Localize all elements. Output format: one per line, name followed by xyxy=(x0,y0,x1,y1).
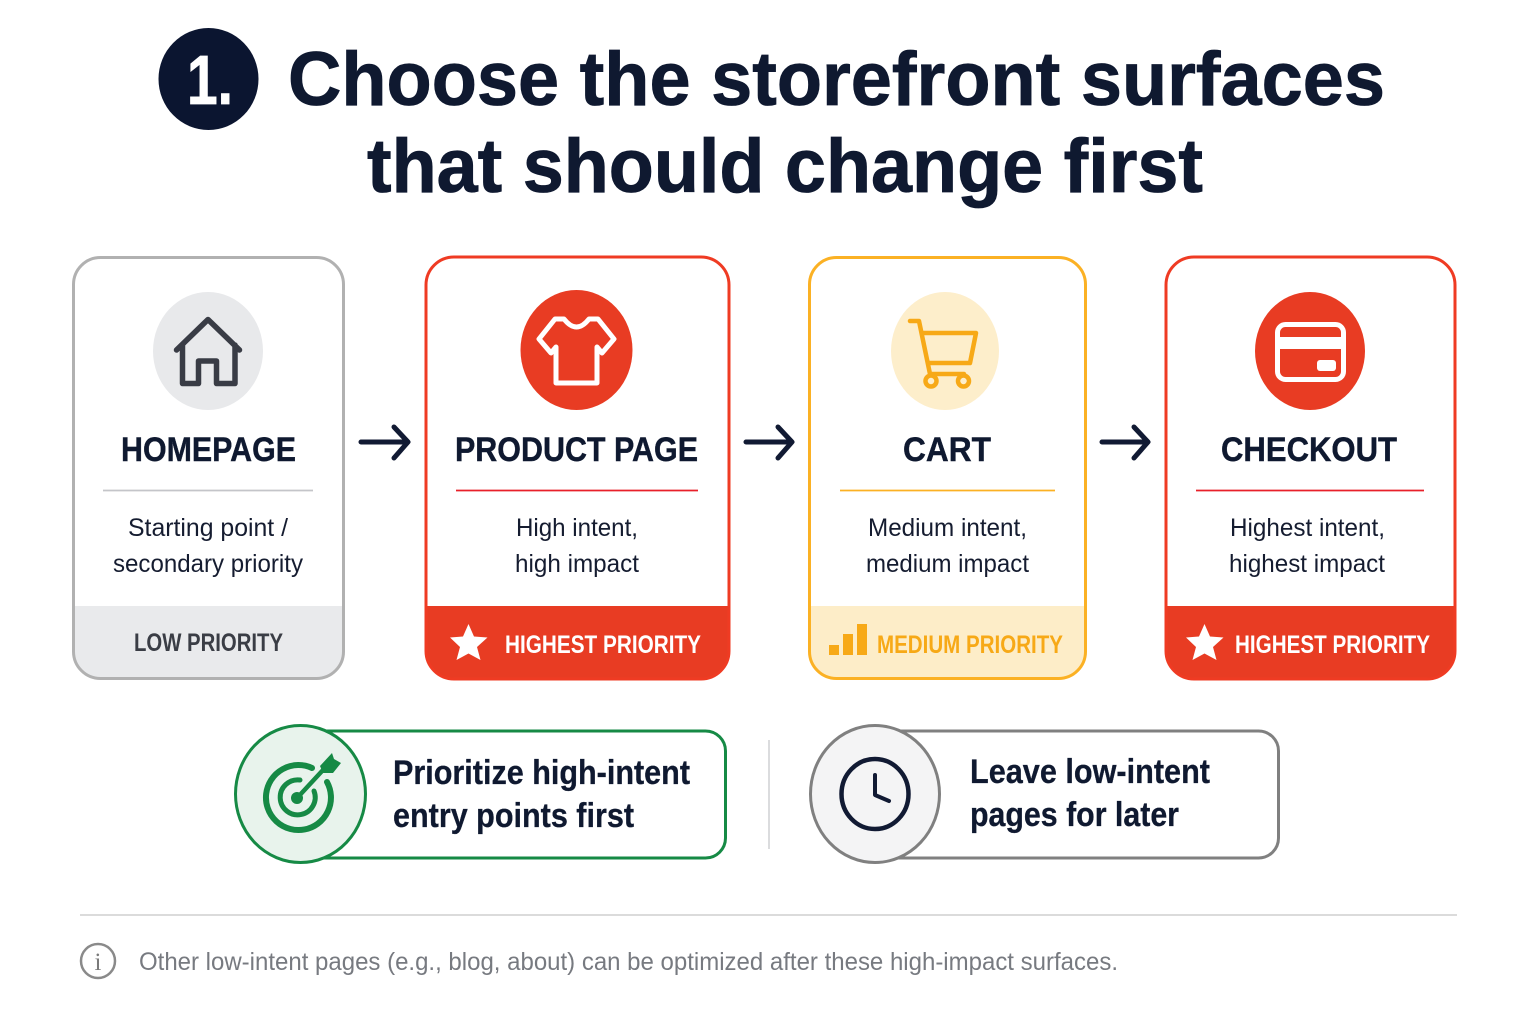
callout text: entry points first xyxy=(393,797,634,835)
callout text: Prioritize high-intent xyxy=(393,754,690,792)
description: high impact xyxy=(515,550,639,578)
priority label: HIGHEST PRIORITY xyxy=(1235,631,1430,659)
arrow xyxy=(361,427,408,458)
title line 1: Choose the storefront surfaces xyxy=(288,37,1385,122)
description: High intent, xyxy=(516,514,638,542)
title xyxy=(158,28,1385,209)
icon: t-shirt xyxy=(520,290,632,410)
heading: CART xyxy=(903,431,991,469)
priority label: HIGHEST PRIORITY xyxy=(505,631,701,659)
heading: PRODUCT PAGE xyxy=(455,431,698,469)
heading: CHECKOUT xyxy=(1221,431,1397,469)
number badge: 1. xyxy=(187,41,233,119)
icon: house xyxy=(153,292,263,410)
arrow xyxy=(746,427,792,458)
callout: prioritize xyxy=(236,726,726,862)
panel: product page xyxy=(425,257,730,680)
callout text xyxy=(970,753,1210,834)
icon: bars xyxy=(829,624,867,655)
callout text: Leave low-intent xyxy=(970,753,1210,791)
footnote xyxy=(81,944,1118,978)
callout text: pages for later xyxy=(970,796,1179,834)
description: Starting point / xyxy=(128,514,288,542)
title line 2: that should change first xyxy=(367,124,1203,209)
priority label: MEDIUM PRIORITY xyxy=(877,631,1063,659)
priority label xyxy=(1186,624,1430,660)
heading: HOMEPAGE xyxy=(121,431,296,469)
icon: clock xyxy=(810,726,940,862)
number badge xyxy=(158,28,258,130)
priority label xyxy=(450,624,701,660)
description xyxy=(515,514,639,578)
priority label: LOW PRIORITY xyxy=(134,629,283,657)
description xyxy=(1229,514,1385,578)
callout text xyxy=(393,754,690,835)
priority label xyxy=(829,624,1063,659)
panel: checkout xyxy=(1165,257,1455,680)
description: secondary priority xyxy=(113,550,303,578)
description: Highest intent, xyxy=(1230,514,1385,542)
description xyxy=(866,514,1029,578)
description xyxy=(113,514,303,578)
panel: homepage xyxy=(74,258,344,678)
description: Medium intent, xyxy=(868,514,1027,542)
icon: credit card xyxy=(1255,292,1365,410)
description: medium impact xyxy=(866,550,1029,578)
footnote text: Other low-intent pages (e.g., blog, about) can be optimized after these high-impact surfaces. xyxy=(139,948,1118,976)
panel: cart xyxy=(810,258,1086,678)
icon: info xyxy=(81,944,115,978)
description: highest impact xyxy=(1229,550,1385,578)
callout: leave for later xyxy=(810,726,1278,862)
icon: info: i xyxy=(95,949,102,976)
icon: shopping cart xyxy=(891,292,999,410)
arrow xyxy=(1102,427,1148,458)
icon: target xyxy=(236,726,366,862)
